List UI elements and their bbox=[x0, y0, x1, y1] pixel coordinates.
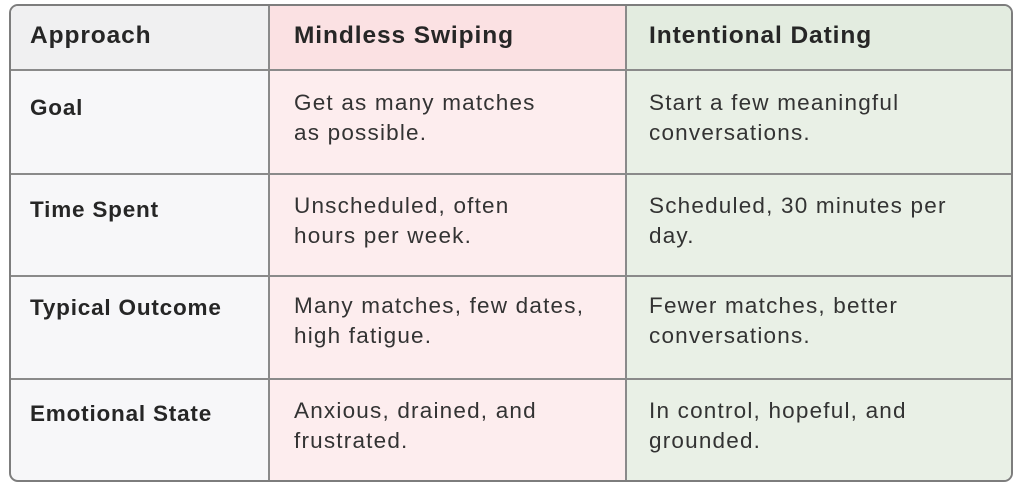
text: intentional goal bbox=[649, 90, 899, 145]
text: swiping time: hours per week. bbox=[294, 223, 472, 248]
text: swiping outcome bbox=[294, 293, 584, 348]
header: Intentional Dating: Intentional Dating bbox=[649, 22, 872, 49]
text: swiping time: Unscheduled, often bbox=[294, 193, 510, 218]
text: intentional emotion: grounded. bbox=[649, 428, 761, 453]
row label: Emotional State: Emotional State bbox=[30, 401, 212, 426]
text: swiping outcome: high fatigue. bbox=[294, 323, 432, 348]
text: intentional outcome: Fewer matches, better bbox=[649, 293, 898, 318]
header: Approach: Approach bbox=[30, 22, 152, 49]
header: Mindless Swiping: Mindless Swiping bbox=[294, 22, 514, 49]
text: intentional time bbox=[649, 193, 947, 248]
text: intentional outcome bbox=[649, 293, 898, 348]
text: swiping emotion: frustrated. bbox=[294, 428, 408, 453]
text: intentional emotion: In control, hopeful, and bbox=[649, 398, 907, 423]
text: intentional outcome: conversations. bbox=[649, 323, 811, 348]
text: swiping goal: as possible. bbox=[294, 120, 427, 145]
text: swiping time bbox=[294, 193, 510, 248]
text: swiping emotion: Anxious, drained, and bbox=[294, 398, 537, 423]
text: intentional goal: conversations. bbox=[649, 120, 811, 145]
text: intentional emotion bbox=[649, 398, 907, 453]
row label: Goal: Goal bbox=[30, 95, 83, 120]
text: intentional time: day. bbox=[649, 223, 695, 248]
text: swiping goal: Get as many matches bbox=[294, 90, 536, 115]
text: intentional goal: Start a few meaningful bbox=[649, 90, 899, 115]
text: swiping emotion bbox=[294, 398, 537, 453]
text: swiping outcome: Many matches, few dates, bbox=[294, 293, 584, 318]
text: swiping goal bbox=[294, 90, 536, 145]
row label: Typical Outcome: Typical Outcome bbox=[30, 295, 222, 320]
row label: Time Spent: Time Spent bbox=[30, 197, 159, 222]
text: intentional time: Scheduled, 30 minutes per bbox=[649, 193, 947, 218]
